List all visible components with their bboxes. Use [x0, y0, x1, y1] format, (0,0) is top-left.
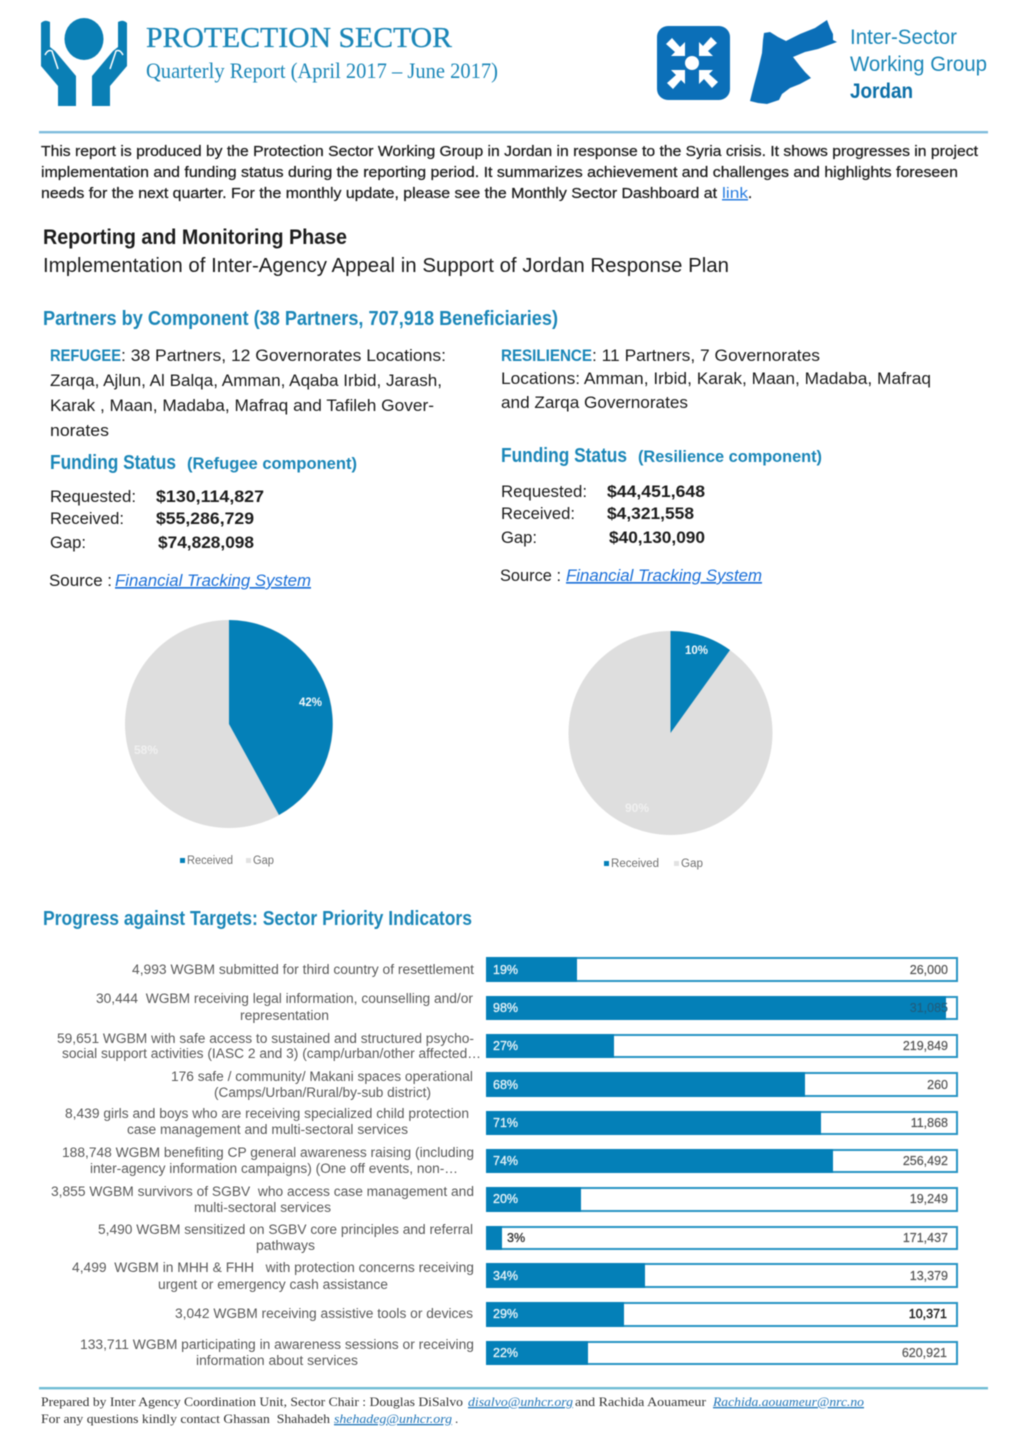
- reporting phase heading: [43, 226, 729, 277]
- bar 29% of 10,371: 29%: [493, 1307, 518, 1321]
- pie chart: resilience funding: [568, 631, 772, 835]
- bar 68% of 260: 260: [927, 1078, 948, 1092]
- bar 74% of 256,492: 256,492: [903, 1154, 948, 1168]
- bar 29% of 10,371: 10,371: [909, 1307, 947, 1321]
- icon: protection sector hands and person logo: [41, 18, 127, 106]
- indicator labels: 4,499 WGBM in MHH & FHH with protection concerns receiving: [72, 1260, 474, 1275]
- footer credits: .: [455, 1411, 458, 1426]
- reporting phase heading: Reporting and Monitoring Phase: [43, 226, 347, 249]
- pie chart: resilience funding: 10%: [685, 643, 708, 657]
- legend: refugee pie: Gap: [253, 855, 274, 867]
- refugee funding figures: $130,114,827: [156, 488, 264, 506]
- refugee locations text: norates: [50, 422, 109, 440]
- refugee source link: Source :: [49, 572, 112, 590]
- inter-sector working group wordmark: Working Group: [850, 53, 987, 76]
- indicator labels: 133,711 WGBM participating in awareness sessions or receiving: [80, 1337, 474, 1352]
- indicator labels: 30,444 WGBM receiving legal information, counselling and/or: [96, 991, 474, 1006]
- refugee funding status heading: (Refugee component): [187, 454, 357, 473]
- indicator labels: [51, 962, 481, 1368]
- legend: resilience pie: [604, 858, 703, 870]
- legend: refugee pie: [180, 855, 274, 867]
- refugee funding figures: $55,286,729: [156, 510, 254, 528]
- bar 98% of 31,085: 31,085: [910, 1001, 948, 1015]
- refugee locations text: : 38 Partners, 12 Governorates Locations:: [121, 347, 446, 365]
- indicator labels: multi-sectoral services: [194, 1200, 331, 1215]
- indicator labels: 176 safe / community/ Makani spaces operational: [171, 1069, 473, 1084]
- bar 68% of 260: [486, 1072, 957, 1097]
- bar 29% of 10,371: [486, 1302, 957, 1327]
- bar 98% of 31,085: 98%: [493, 1001, 518, 1015]
- footer credits: [41, 1394, 865, 1426]
- resilience funding status heading: (Resilience component): [638, 447, 822, 466]
- refugee locations text: [50, 347, 446, 440]
- refugee funding figures: Requested:: [50, 488, 136, 506]
- footer credits: For any questions kindly contact Ghassan Shahadeh: [41, 1411, 331, 1426]
- indicator labels: 8,439 girls and boys who are receiving specialized child protection: [65, 1106, 469, 1121]
- resilience funding figures: Requested:: [501, 483, 587, 501]
- icon: inter-sector coordination arrows: [657, 26, 730, 100]
- refugee locations text: Karak , Maan, Madaba, Mafraq and Tafileh Gover-: [50, 397, 434, 415]
- legend: resilience pie: Gap: [681, 858, 703, 870]
- refugee source link: Financial Tracking System: [115, 572, 311, 590]
- refugee funding figures: [50, 488, 264, 552]
- intro text block: .: [748, 185, 752, 202]
- panel: refugee component: [49, 347, 446, 590]
- resilience funding status heading: [501, 445, 822, 467]
- resilience source link: Source :: [500, 567, 561, 585]
- bar 20% of 19,249: [486, 1187, 957, 1212]
- resilience funding figures: [501, 483, 705, 547]
- refugee funding figures: Received:: [50, 510, 124, 528]
- bar 3% of 171,437: 3%: [507, 1231, 525, 1245]
- indicator labels: pathways: [256, 1238, 315, 1253]
- indicator labels: 59,651 WGBM with safe access to sustained and structured psycho-: [57, 1031, 474, 1046]
- legend: refugee pie: Received: [187, 855, 233, 867]
- indicator labels: (Camps/Urban/Rural/by-sub district): [214, 1085, 431, 1100]
- resilience locations text: [501, 347, 931, 412]
- bar 71% of 11,868: [486, 1111, 957, 1135]
- footer credits: and Rachida Aouameur: [575, 1394, 707, 1409]
- title: [146, 22, 498, 83]
- bar 20% of 19,249: 20%: [493, 1192, 518, 1206]
- bar 27% of 219,849: 219,849: [903, 1039, 948, 1053]
- bar chart: progress against targets: [486, 957, 957, 1365]
- indicator labels: 3,855 WGBM survivors of SGBV who access case management and: [51, 1184, 474, 1199]
- bar 71% of 11,868: 71%: [493, 1116, 518, 1130]
- title: PROTECTION SECTOR: [146, 22, 453, 54]
- indicator labels: 5,490 WGBM sensitized on SGBV core principles and referral: [98, 1222, 473, 1237]
- bar 27% of 219,849: 27%: [493, 1039, 518, 1053]
- resilience funding figures: $4,321,558: [607, 505, 694, 523]
- resilience locations text: and Zarqa Governorates: [501, 394, 688, 412]
- indicator labels: 188,748 WGBM benefiting CP general awareness raising (including: [62, 1145, 474, 1160]
- bar 74% of 256,492: [486, 1149, 957, 1173]
- indicator labels: social support activities (IASC 2 and 3) (camp/urban/other affected…: [62, 1046, 481, 1061]
- inter-sector working group wordmark: [850, 26, 987, 103]
- indicator labels: urgent or emergency cash assistance: [158, 1277, 388, 1292]
- refugee locations text: REFUGEE: [50, 347, 121, 365]
- reporting phase heading: Implementation of Inter-Agency Appeal in Support of Jordan Response Plan: [43, 255, 729, 277]
- bar 22% of 620,921: [486, 1341, 957, 1365]
- resilience funding figures: Gap:: [501, 529, 537, 547]
- refugee funding status heading: [50, 452, 357, 474]
- resilience source link: Financial Tracking System: [566, 567, 762, 585]
- bar 20% of 19,249: 19,249: [910, 1192, 948, 1206]
- footer credits: shehadeg@unhcr.org: [334, 1411, 453, 1426]
- pie chart: refugee funding: [125, 620, 333, 828]
- bar 34% of 13,379: [486, 1263, 957, 1288]
- inter-sector working group wordmark: Inter-Sector: [850, 26, 957, 49]
- refugee funding figures: Gap:: [50, 534, 86, 552]
- indicator labels: inter-agency information campaigns) (One off events, non-…: [90, 1161, 458, 1176]
- resilience funding status heading: Funding Status: [501, 445, 627, 467]
- bar 34% of 13,379: 34%: [493, 1269, 518, 1283]
- resilience locations text: : 11 Partners, 7 Governorates: [592, 347, 820, 365]
- inter-sector working group wordmark: Jordan: [850, 80, 913, 103]
- indicator labels: representation: [240, 1008, 329, 1023]
- bar 68% of 260: 68%: [493, 1078, 518, 1092]
- bar 19% of 26,000: 19%: [493, 963, 518, 977]
- indicator labels: information about services: [196, 1353, 358, 1368]
- refugee funding figures: $74,828,098: [158, 534, 254, 552]
- refugee funding status heading: Funding Status: [50, 452, 176, 474]
- bar 19% of 26,000: 26,000: [910, 963, 948, 977]
- resilience funding figures: $44,451,648: [607, 483, 705, 501]
- pie chart: resilience funding: 90%: [625, 801, 649, 815]
- bar 19% of 26,000: [486, 957, 957, 982]
- heading: partners by component: Partners by Component (38 Partners, 707,918 Beneficiaries): [43, 308, 558, 330]
- bar 34% of 13,379: 13,379: [910, 1269, 948, 1283]
- bar 22% of 620,921: 620,921: [902, 1346, 947, 1360]
- bar 74% of 256,492: 74%: [493, 1154, 518, 1168]
- bar 98% of 31,085: [486, 996, 957, 1020]
- intro text block: link: [722, 185, 749, 202]
- title: Quarterly Report (April 2017 – June 2017): [146, 58, 498, 83]
- icon: map of Jordan: [750, 20, 837, 104]
- bar 3% of 171,437: 171,437: [903, 1231, 948, 1245]
- intro text block: needs for the next quarter. For the monthly update, please see the Monthly Sector Dashboard at: [41, 185, 718, 202]
- resilience funding figures: Received:: [501, 505, 575, 523]
- bar 3% of 171,437: [486, 1226, 957, 1250]
- refugee locations text: Zarqa, Ajlun, Al Balqa, Amman, Aqaba Irbid, Jarash,: [50, 372, 442, 390]
- intro text block: This report is produced by the Protection Sector Working Group in Jordan in response to the Syria crisis. It shows progresses in project: [41, 143, 979, 160]
- footer credits: Prepared by Inter Agency Coordination Unit, Sector Chair : Douglas DiSalvo: [41, 1394, 463, 1409]
- footer credits: Rachida.aouameur@nrc.no: [712, 1394, 865, 1409]
- resilience locations text: RESILIENCE: [501, 347, 592, 365]
- pie chart: refugee funding: 58%: [134, 743, 158, 757]
- indicator labels: case management and multi-sectoral services: [127, 1122, 408, 1137]
- legend: resilience pie: Received: [611, 858, 659, 870]
- pie chart: refugee funding: 42%: [299, 695, 322, 709]
- indicator labels: 3,042 WGBM receiving assistive tools or devices: [175, 1306, 473, 1321]
- heading: progress against targets: Progress against Targets: Sector Priority Indicators: [43, 908, 472, 930]
- resilience funding figures: $40,130,090: [609, 529, 705, 547]
- footer credits: disalvo@unhcr.org: [468, 1394, 574, 1409]
- intro text block: [41, 143, 979, 202]
- resilience locations text: Locations: Amman, Irbid, Karak, Maan, Madaba, Mafraq: [501, 370, 931, 388]
- bar 27% of 219,849: [486, 1034, 957, 1058]
- intro text block: implementation and funding status during the reporting period. It summarizes achievement and challenges and highlights foreseen: [41, 164, 958, 181]
- bar 71% of 11,868: 11,868: [911, 1116, 948, 1130]
- panel: resilience component: [500, 347, 931, 585]
- bar 22% of 620,921: 22%: [493, 1346, 518, 1360]
- indicator labels: 4,993 WGBM submitted for third country of resettlement: [132, 962, 474, 977]
